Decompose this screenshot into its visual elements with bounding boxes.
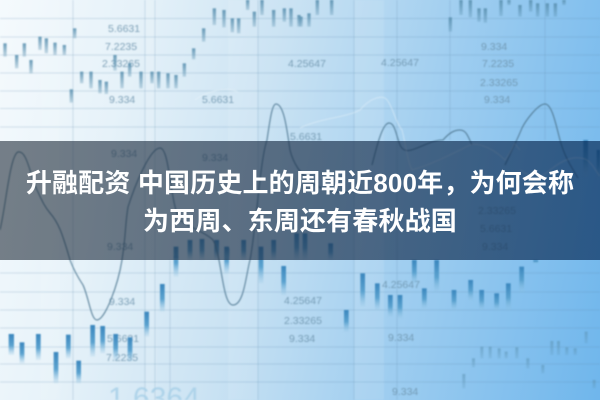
number labels: 4.25647 — [288, 58, 326, 70]
number labels: 9.334 — [388, 332, 414, 344]
title: 为西周、东周还有春秋战国 — [143, 206, 457, 236]
number labels: 7.2235 — [482, 58, 514, 70]
number labels: 5.6631 — [480, 223, 512, 235]
number labels: 2.33265 — [102, 58, 140, 70]
number labels: 9.334 — [107, 241, 133, 253]
title: 升融配资 中国历史上的周朝近800年，为何会称 — [26, 168, 574, 198]
number labels: 5.6631 — [202, 94, 234, 106]
pale curves — [195, 90, 600, 177]
number labels: 9.334 — [109, 296, 135, 308]
number labels: 4.25647 — [284, 295, 322, 307]
candlesticks — [3, 0, 566, 103]
number labels: 9.334 — [482, 241, 508, 253]
number labels: 9.334 — [109, 94, 135, 106]
number labels: 4.25647 — [381, 57, 419, 69]
number labels: 2.33265 — [284, 315, 322, 327]
number labels: 7.2235 — [105, 41, 137, 53]
number labels: 5.6631 — [107, 333, 139, 345]
title — [26, 168, 574, 236]
number labels: 7.2235 — [106, 352, 138, 364]
number labels: 4.25647 — [382, 279, 420, 291]
number labels: 9.334 — [392, 386, 418, 398]
trend curves — [0, 104, 578, 320]
number labels: 9.334 — [484, 94, 510, 106]
number labels: 5.6631 — [108, 23, 140, 35]
number labels: 2.33265 — [480, 77, 518, 89]
dark title band — [0, 141, 600, 260]
number labels: 9.334 — [111, 148, 137, 160]
number labels: 2.33265 — [478, 205, 516, 217]
number labels — [102, 23, 518, 400]
number labels: 9.334 — [481, 41, 507, 53]
number labels: 5.6631 — [290, 131, 322, 143]
number labels: 9.334 — [289, 333, 315, 345]
number labels: 9.334 — [202, 152, 228, 164]
